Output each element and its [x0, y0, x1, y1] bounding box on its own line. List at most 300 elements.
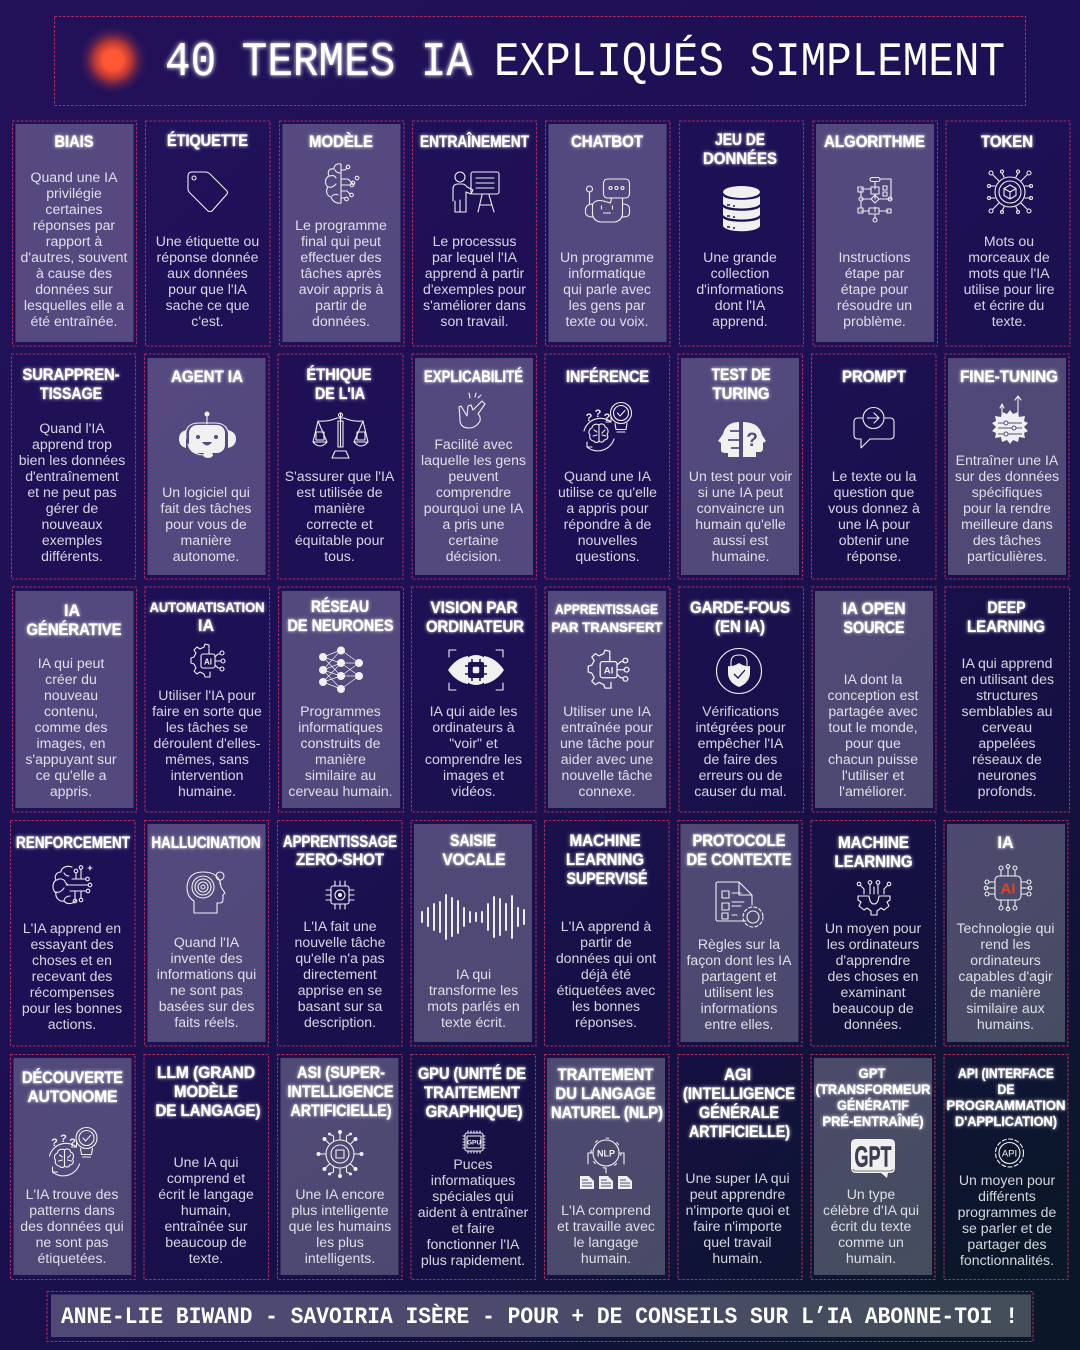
definition: entre elles.: [705, 1016, 773, 1032]
definition: ne sont pas: [36, 1234, 108, 1250]
icon: GPU chip: GPU: [467, 1140, 481, 1146]
heading: CHATBOT: [571, 133, 643, 151]
definition: images, en: [37, 735, 105, 751]
definition: qui parle avec: [563, 281, 651, 297]
definition: et faire: [451, 1220, 495, 1236]
heading: [22, 1068, 123, 1106]
definition: les tâches se: [166, 719, 248, 735]
definition: les gens par: [569, 297, 646, 313]
panel: garde-fous: [679, 587, 804, 812]
definition: vidéos.: [451, 783, 496, 799]
definition: appelées: [978, 735, 1036, 751]
definition: comme des: [35, 719, 107, 735]
definition: apprend.: [712, 313, 768, 329]
heading: SUPERVISÉ: [566, 869, 648, 888]
heading: DE NEURONES: [288, 617, 394, 635]
heading: LEARNING: [834, 853, 912, 871]
definition: Quand une IA: [31, 169, 118, 185]
panel: explicabilité: [412, 354, 536, 579]
definition: nouvelle tâche: [295, 934, 386, 950]
definition: différents.: [41, 548, 103, 564]
icon: flowchart: [858, 178, 892, 222]
definition: rend les: [980, 936, 1031, 952]
heading: D'APPLICATION): [955, 1113, 1057, 1129]
definition: examinant: [840, 984, 906, 1000]
definition: célèbre d'IA qui: [823, 1202, 919, 1218]
definition: dont l'IA: [715, 297, 766, 313]
definition: humains.: [977, 1016, 1034, 1032]
heading: TISSAGE: [40, 385, 102, 403]
heading: [418, 1064, 526, 1121]
definition: par lequel l'IA: [432, 249, 518, 265]
heading: [834, 834, 912, 871]
icon: two heads: [718, 422, 766, 457]
definition: entraînée sur: [164, 1218, 248, 1234]
panel: entraînement: [412, 121, 536, 346]
definition: cerveau humain.: [288, 783, 393, 799]
definition: laquelle les gens: [421, 452, 526, 468]
definition: l'utiliser et: [842, 767, 904, 783]
definition: ordinateurs à: [432, 719, 515, 735]
definition: Facilité avec: [434, 436, 513, 452]
definition: déjà été: [581, 966, 631, 982]
panel: hallucination: [144, 820, 268, 1046]
definition: avoir appris à: [299, 281, 383, 297]
definition: a appris pour: [566, 500, 649, 516]
definition: n'importe quoi et: [686, 1202, 789, 1218]
icon: API gear: [996, 1139, 1024, 1167]
definition: nouvelle tâche: [562, 767, 653, 783]
definition: cerveau: [982, 719, 1032, 735]
definition: vous donnez à: [828, 500, 920, 516]
definition: invente des: [170, 950, 243, 966]
heading: RÉSEAU: [311, 597, 369, 616]
heading: IA OPEN: [842, 600, 906, 618]
definition: humaine.: [178, 783, 236, 799]
heading: SURAPPREN-: [22, 366, 120, 384]
definition: Règles sur la: [698, 936, 780, 952]
heading: AUTONOME: [28, 1088, 118, 1106]
icon: brain and bulb: [50, 1128, 97, 1176]
definition: écrit du texte: [831, 1218, 911, 1234]
definition: aider avec une: [561, 751, 653, 767]
definition: Vérifications: [702, 703, 779, 719]
definition: questions.: [575, 548, 640, 564]
heading: IA: [998, 834, 1014, 852]
definition: L'IA apprend en: [23, 920, 121, 936]
definition: données.: [844, 1016, 902, 1032]
definition: données qui ont: [556, 950, 656, 966]
definition: le langage: [573, 1234, 639, 1250]
panel: machine learning: [811, 820, 936, 1046]
definition: sache ce que: [166, 297, 250, 313]
definition: intervention: [171, 767, 243, 783]
heading: MACHINE: [570, 832, 640, 850]
definition: manière: [315, 751, 366, 767]
icon: brain and bulb: ?: [586, 412, 593, 424]
definition: d'informations: [696, 281, 784, 297]
heading: INTELLIGENCE: [288, 1083, 394, 1101]
definition: similaire au: [305, 767, 376, 783]
heading: PAR TRANSFERT: [552, 619, 663, 635]
heading: DE L'IA: [315, 385, 365, 403]
panel: réseau de neurones: [278, 587, 404, 812]
definition: ne sont pas: [170, 982, 243, 998]
definition: réponses.: [575, 1014, 637, 1030]
heading: [712, 366, 770, 403]
panel: éthique de l'IA: [278, 354, 403, 579]
heading: PROTOCOLE: [692, 832, 786, 850]
definition: été entraînée.: [31, 313, 117, 329]
definition: ce qu'elle a: [36, 767, 107, 783]
definition: neurones: [978, 767, 1036, 783]
heading: LEARNING: [967, 618, 1045, 636]
definition: problème.: [843, 313, 906, 329]
definition: transforme les: [429, 982, 518, 998]
heading: ASI (SUPER-: [297, 1064, 385, 1082]
panel: vision par ordinateur: [412, 587, 536, 812]
icon: brain and bulb: ?: [51, 1137, 58, 1149]
icon: gear chip: AI: [604, 665, 613, 676]
definition: faire n'importe: [693, 1218, 782, 1234]
definition: mots parlés en: [427, 998, 520, 1014]
heading: DE: [998, 1081, 1014, 1097]
icon: glowing red dot: [79, 26, 147, 94]
definition: écrit le langage: [158, 1186, 254, 1202]
definition: manière: [314, 500, 365, 516]
heading: [150, 599, 264, 635]
definition: intégrées pour: [695, 719, 786, 735]
definition: partir de: [315, 297, 367, 313]
panel: ASI: [278, 1054, 402, 1280]
heading: TEST DE: [712, 366, 770, 384]
definition: autonome.: [173, 548, 239, 564]
definition: images et: [443, 767, 504, 783]
definition: Quand l'IA: [174, 934, 240, 950]
icon: radial chip: [316, 1130, 364, 1178]
definition: programmes de: [958, 1204, 1057, 1220]
definition: d'autres, souvent: [21, 249, 128, 265]
definition: réponses par: [33, 217, 115, 233]
definition: les ordinateurs: [827, 936, 919, 952]
icon: red AI chip: [984, 865, 1032, 911]
panel: modèle: [280, 121, 404, 346]
icon: sound wave: [422, 895, 524, 939]
definition: pour la rendre: [963, 500, 1051, 516]
heading: DEEP: [988, 599, 1026, 617]
definition: peuvent: [448, 468, 499, 484]
definition: beaucoup de: [832, 1000, 914, 1016]
definition: les plus: [316, 1234, 364, 1250]
heading: [26, 602, 122, 639]
definition: L'IA trouve des: [26, 1186, 118, 1202]
heading: [683, 1066, 795, 1141]
panel: IA open source: [812, 587, 936, 812]
definition: à cause des: [36, 265, 112, 281]
definition: différents: [978, 1188, 1036, 1204]
panel: renforcement: [10, 820, 135, 1046]
panel: GPT: [811, 1054, 935, 1280]
panel: jeu de données: [680, 121, 804, 346]
panel: prompt: [812, 354, 936, 579]
definition: et ne peut pas: [27, 484, 117, 500]
definition: texte ou voix.: [565, 313, 649, 329]
heading: [816, 1065, 930, 1129]
definition: L'IA apprend à: [561, 918, 651, 934]
definition: données sur: [35, 281, 113, 297]
definition: pour les bonnes: [22, 1000, 122, 1016]
definition: créer du: [45, 671, 97, 687]
definition: description.: [304, 1014, 376, 1030]
definition: tous.: [324, 548, 355, 564]
definition: question que: [834, 484, 915, 500]
definition: de manière: [970, 984, 1041, 1000]
title banner: [54, 16, 1026, 106]
definition: beaucoup de: [165, 1234, 247, 1250]
definition: conception est: [828, 687, 919, 703]
definition: Un moyen pour: [825, 920, 921, 936]
definition: Le processus: [433, 233, 516, 249]
definition: texte.: [189, 1250, 223, 1266]
definition: comme un: [838, 1234, 904, 1250]
definition: Un type: [847, 1186, 895, 1202]
heading: DU LANGAGE: [556, 1085, 656, 1103]
heading: [288, 1064, 394, 1120]
definition: et écrire du: [974, 297, 1044, 313]
icon: gear chip: [191, 644, 225, 677]
definition: convaincre un: [697, 500, 784, 516]
definition: privilégie: [46, 185, 102, 201]
definition: des données qui: [20, 1218, 124, 1234]
heading: ENTRAÎNEMENT: [420, 132, 529, 151]
icon: robot head: [179, 412, 236, 458]
heading: EXPLICABILITÉ: [424, 367, 523, 386]
heading: DÉCOUVERTE: [22, 1068, 123, 1087]
heading: LEARNING: [566, 851, 644, 869]
definition: ordinateurs: [970, 952, 1041, 968]
definition: IA qui: [456, 966, 491, 982]
definition: est utilisée de: [296, 484, 383, 500]
heading: TOKEN: [981, 133, 1033, 151]
heading: IA: [64, 602, 80, 620]
title: expliqués simplement: EXPLIQUÉS SIMPLEMENT: [494, 35, 1005, 90]
icon: gear sliders with arrows: [992, 396, 1028, 444]
icon: token cube: [988, 170, 1032, 214]
definition: certaine: [448, 532, 499, 548]
heading: [306, 365, 372, 403]
definition: réponse.: [847, 548, 901, 564]
heading: LLM (GRAND: [157, 1064, 255, 1082]
definition: informatique: [568, 265, 646, 281]
definition: résoudre un: [837, 297, 912, 313]
definition: Un test pour voir: [689, 468, 793, 484]
definition: Une super IA qui: [685, 1170, 790, 1186]
icon: gear with circuits: [857, 881, 891, 915]
definition: Mots ou: [984, 233, 1034, 249]
definition: Quand une IA: [564, 468, 652, 484]
definition: s'améliorer dans: [423, 297, 526, 313]
definition: plus intelligente: [291, 1202, 389, 1218]
definition: fonctionnalités.: [960, 1252, 1054, 1268]
icon: GPT speech bubble: [851, 1139, 895, 1178]
panel: fine-tuning: [945, 354, 1069, 579]
heading: APPRENTISSAGE: [283, 833, 397, 851]
definition: basées sur des: [159, 998, 254, 1014]
definition: faits réels.: [174, 1014, 239, 1030]
definition: d'apprendre: [836, 952, 911, 968]
definition: humain.: [581, 1250, 631, 1266]
definition: humaine.: [712, 548, 769, 564]
definition: "voir" et: [449, 735, 498, 751]
definition: Une grande: [703, 249, 777, 265]
definition: final qui peut: [301, 233, 381, 249]
panel: apprentissage zero-shot: [278, 820, 402, 1046]
heading: GPT: [858, 1065, 886, 1081]
definition: choses et en: [32, 952, 112, 968]
definition: morceaux de: [968, 249, 1050, 265]
definition: texte.: [992, 313, 1026, 329]
panel: agent IA: [144, 354, 269, 579]
definition: intelligents.: [305, 1250, 375, 1266]
icon: API gear: API: [1002, 1148, 1017, 1160]
definition: Une IA encore: [295, 1186, 385, 1202]
definition: aussi est: [713, 532, 768, 548]
heading: PROGRAMMATION: [946, 1097, 1066, 1113]
definition: manière: [181, 532, 232, 548]
definition: tâches après: [301, 265, 381, 281]
icon: eye chip: [448, 650, 504, 690]
definition: pour que: [845, 735, 901, 751]
heading: PRÉ-ENTRAÎNÉ): [822, 1112, 924, 1129]
heading: TRAITEMENT: [424, 1084, 520, 1102]
icon: head with spiral: [187, 872, 225, 913]
definition: profonds.: [978, 783, 1036, 799]
heading: ORDINATEUR: [426, 618, 524, 636]
definition: façon dont les IA: [686, 952, 792, 968]
heading: HALLUCINATION: [152, 834, 260, 852]
definition: Programmes: [300, 703, 381, 719]
icon: chip: [326, 881, 354, 909]
definition: d'entraînement: [25, 468, 119, 484]
heading: VOCALE: [442, 851, 506, 869]
heading: BIAIS: [54, 133, 94, 151]
definition: contenu,: [44, 703, 98, 719]
definition: réponse donnée: [157, 249, 259, 265]
panel: API: [944, 1054, 1068, 1280]
definition: étiquetées avec: [557, 982, 655, 998]
definition: déroulent d'elles-: [154, 735, 261, 751]
definition: décision.: [446, 548, 501, 564]
icon: lock shield: [716, 648, 762, 694]
heading: [551, 1066, 663, 1122]
heading: TURING: [712, 385, 770, 403]
heading: AGI: [724, 1066, 751, 1084]
heading: ARTIFICIELLE): [290, 1102, 392, 1120]
definition: en utilisant des: [960, 671, 1054, 687]
definition: aident à entraîner: [418, 1204, 529, 1220]
heading: (TRANSFORMEUR: [816, 1081, 930, 1097]
icon: snapping hand: [459, 393, 485, 428]
panel: saisie vocale: [411, 820, 536, 1046]
icon: NLP gear and documents: [580, 1138, 632, 1189]
definition: humain,: [181, 1202, 231, 1218]
icon: two heads: ?: [746, 430, 758, 451]
heading: [703, 131, 777, 168]
heading: (INTELLIGENCE: [683, 1085, 795, 1103]
panel: algorithme: [813, 121, 938, 346]
heading: (EN IA): [715, 618, 765, 636]
icon: NLP gear and documents: NLP: [597, 1148, 615, 1158]
definition: patterns dans: [29, 1202, 115, 1218]
heading: ZERO-SHOT: [296, 851, 384, 869]
definition: son travail.: [440, 313, 509, 329]
panel: test de Turing: [678, 354, 802, 579]
definition: étape pour: [841, 281, 908, 297]
definition: aux données: [167, 265, 248, 281]
icon: person and board: [453, 172, 499, 212]
definition: et travaille avec: [557, 1218, 655, 1234]
definition: recevant des: [32, 968, 112, 984]
heading: MACHINE: [838, 834, 909, 852]
heading: [946, 1065, 1066, 1129]
panel: GPU: [411, 1054, 536, 1280]
definition: apprend à partir: [425, 265, 525, 281]
title: 40 termes IA: 40 TERMES IA: [165, 36, 472, 90]
definition: utilisent les: [704, 984, 774, 1000]
definition: pour vous de: [165, 516, 247, 532]
icon: neural network: [319, 646, 363, 693]
definition: peut apprendre: [690, 1186, 785, 1202]
definition: certaines: [45, 201, 103, 217]
definition: une tâche pour: [560, 735, 654, 751]
definition: s'appuyant sur: [25, 751, 117, 767]
definition: Technologie qui: [957, 920, 1054, 936]
panel: découverte autonome: [10, 1054, 135, 1280]
definition: Un moyen pour: [959, 1172, 1055, 1188]
definition: Quand l'IA: [39, 420, 105, 436]
definition: comprendre: [436, 484, 511, 500]
heading: SOURCE: [844, 619, 904, 637]
definition: capables d'agir: [958, 968, 1053, 984]
definition: texte écrit.: [441, 1014, 506, 1030]
definition: rapport à: [46, 233, 102, 249]
definition: données.: [312, 313, 370, 329]
definition: tout le monde,: [828, 719, 918, 735]
icon: chat robot: [586, 179, 630, 222]
definition: informatiques: [298, 719, 383, 735]
panel: étiquette: [146, 121, 270, 346]
definition: obtenir une: [839, 532, 909, 548]
icon: speech bubble with arrow: [854, 408, 894, 448]
heading: JEU DE: [715, 131, 765, 149]
heading: [686, 832, 792, 869]
definition: chacun puisse: [828, 751, 918, 767]
icon: brain and bulb: ?: [595, 408, 602, 420]
definition: nouveau: [44, 687, 98, 703]
icon: brain and bulb: [584, 402, 632, 451]
definition: Le programme: [295, 217, 387, 233]
panel: apprentissage par transfert: [545, 587, 670, 812]
definition: c'est.: [191, 313, 224, 329]
definition: informatiques: [431, 1172, 515, 1188]
definition: lesquelles elle a: [24, 297, 124, 313]
heading: FINE-TUNING: [960, 368, 1058, 386]
heading: [426, 599, 524, 636]
definition: des tâches: [973, 532, 1041, 548]
heading: GÉNÉRATIVE: [26, 620, 122, 639]
definition: empêcher l'IA: [698, 735, 784, 751]
panel: IA: [944, 820, 1068, 1046]
